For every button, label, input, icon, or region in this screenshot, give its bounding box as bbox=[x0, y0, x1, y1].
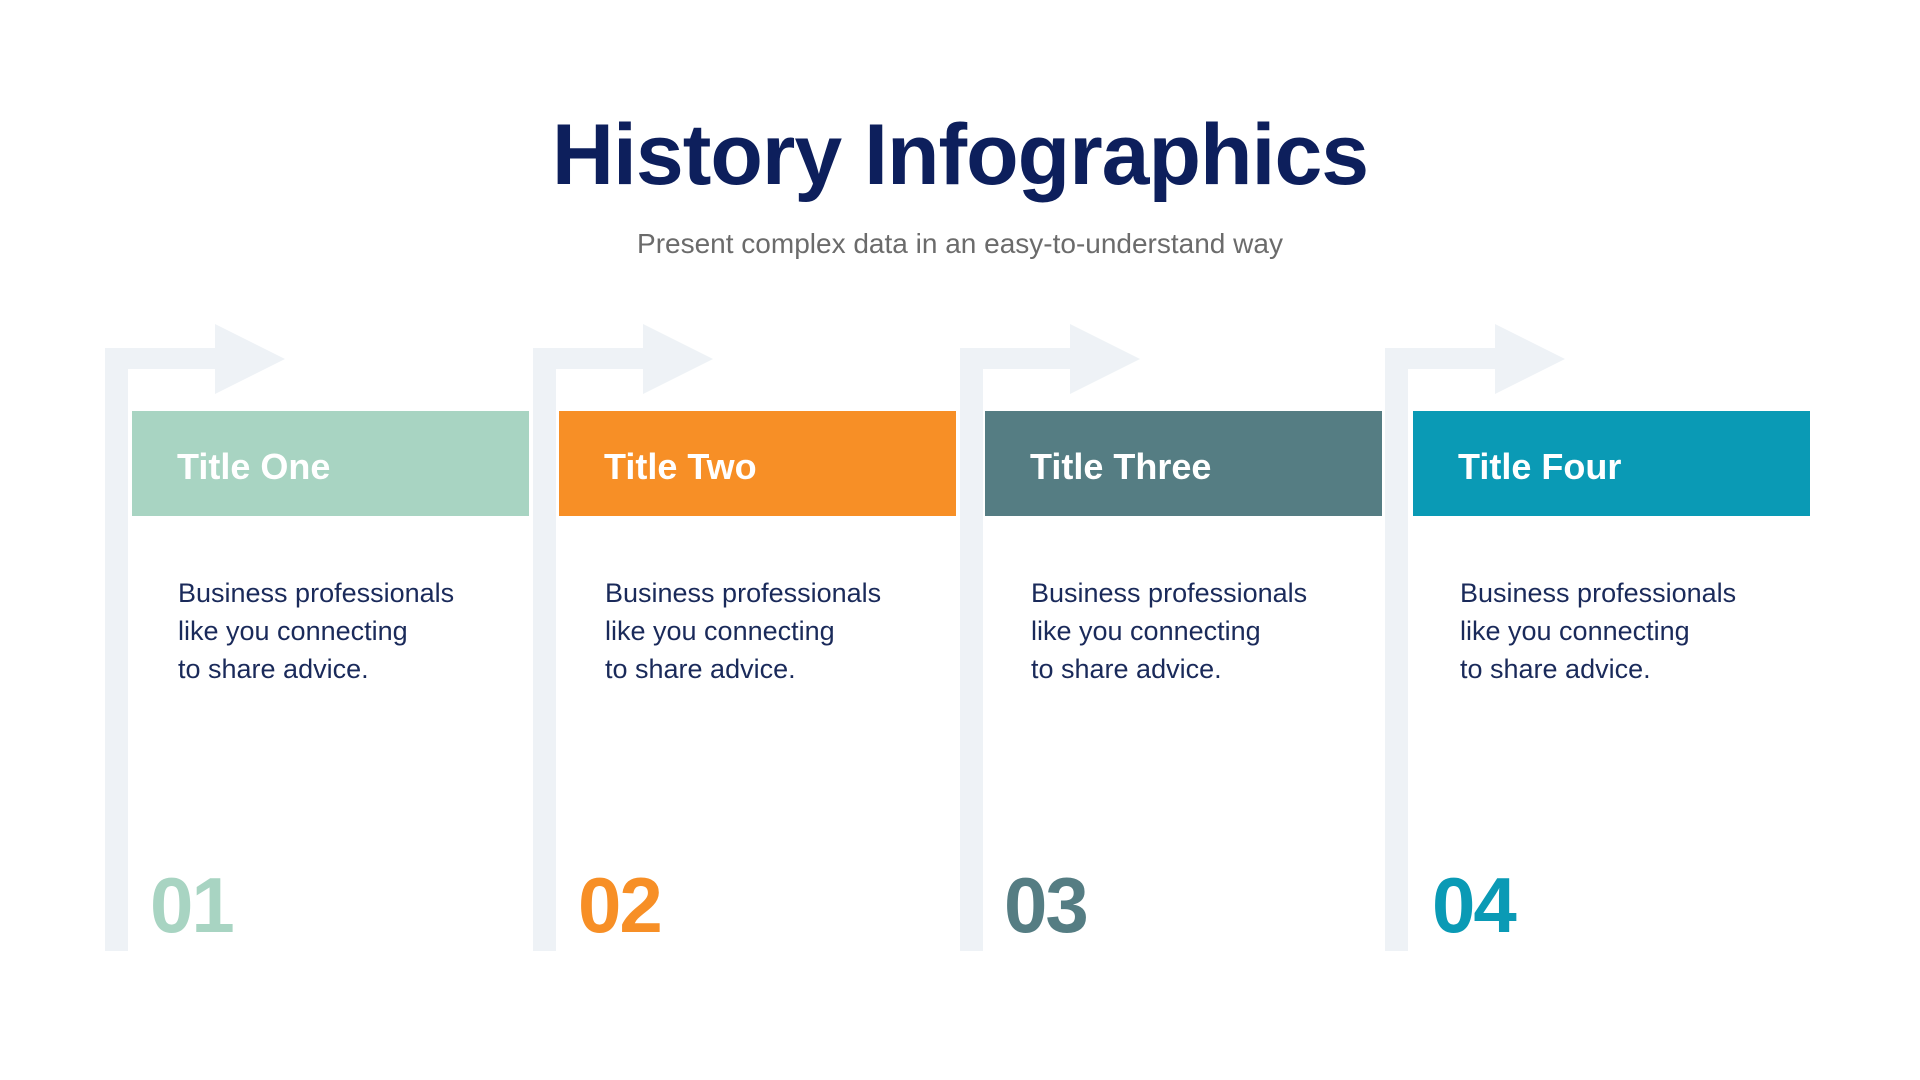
text 3: like you connecting bbox=[1031, 616, 1261, 646]
text 3 bbox=[1031, 578, 1307, 684]
panel: title one bbox=[132, 411, 529, 516]
text 3: to share advice. bbox=[1031, 654, 1222, 684]
text 4: Business professionals bbox=[1460, 578, 1736, 608]
panel: title two bbox=[559, 411, 956, 516]
text 1: to share advice. bbox=[178, 654, 369, 684]
subtitle: Present complex data in an easy-to-understand way bbox=[637, 228, 1283, 259]
text 4: like you connecting bbox=[1460, 616, 1690, 646]
arrow 4 bbox=[1385, 324, 1564, 951]
column 1 bbox=[105, 324, 284, 951]
text 2: Business professionals bbox=[605, 578, 881, 608]
column 4 bbox=[1385, 324, 1564, 951]
text 2: to share advice. bbox=[605, 654, 796, 684]
number 04: 04 bbox=[1432, 861, 1515, 949]
number 01: 01 bbox=[150, 861, 233, 949]
text 4 bbox=[1460, 578, 1736, 684]
column 2 bbox=[533, 324, 712, 951]
number 02: 02 bbox=[578, 861, 661, 949]
text 2: like you connecting bbox=[605, 616, 835, 646]
panel: title three: Title Three bbox=[1030, 446, 1211, 487]
panel: title four: Title Four bbox=[1458, 446, 1621, 487]
panel: title four bbox=[1413, 411, 1810, 516]
panel: title two: Title Two bbox=[604, 446, 757, 487]
text 3: Business professionals bbox=[1031, 578, 1307, 608]
panel: title one: Title One bbox=[177, 446, 330, 487]
column 3 bbox=[960, 324, 1140, 951]
title: History Infographics bbox=[552, 107, 1368, 203]
panel: title three bbox=[985, 411, 1382, 516]
text 1 bbox=[178, 578, 454, 684]
text 1: Business professionals bbox=[178, 578, 454, 608]
text 2 bbox=[605, 578, 881, 684]
arrow 2 bbox=[533, 324, 712, 951]
arrow 3 bbox=[960, 324, 1140, 951]
text 1: like you connecting bbox=[178, 616, 408, 646]
number 03: 03 bbox=[1004, 861, 1087, 949]
text 4: to share advice. bbox=[1460, 654, 1651, 684]
arrow 1 bbox=[105, 324, 284, 951]
